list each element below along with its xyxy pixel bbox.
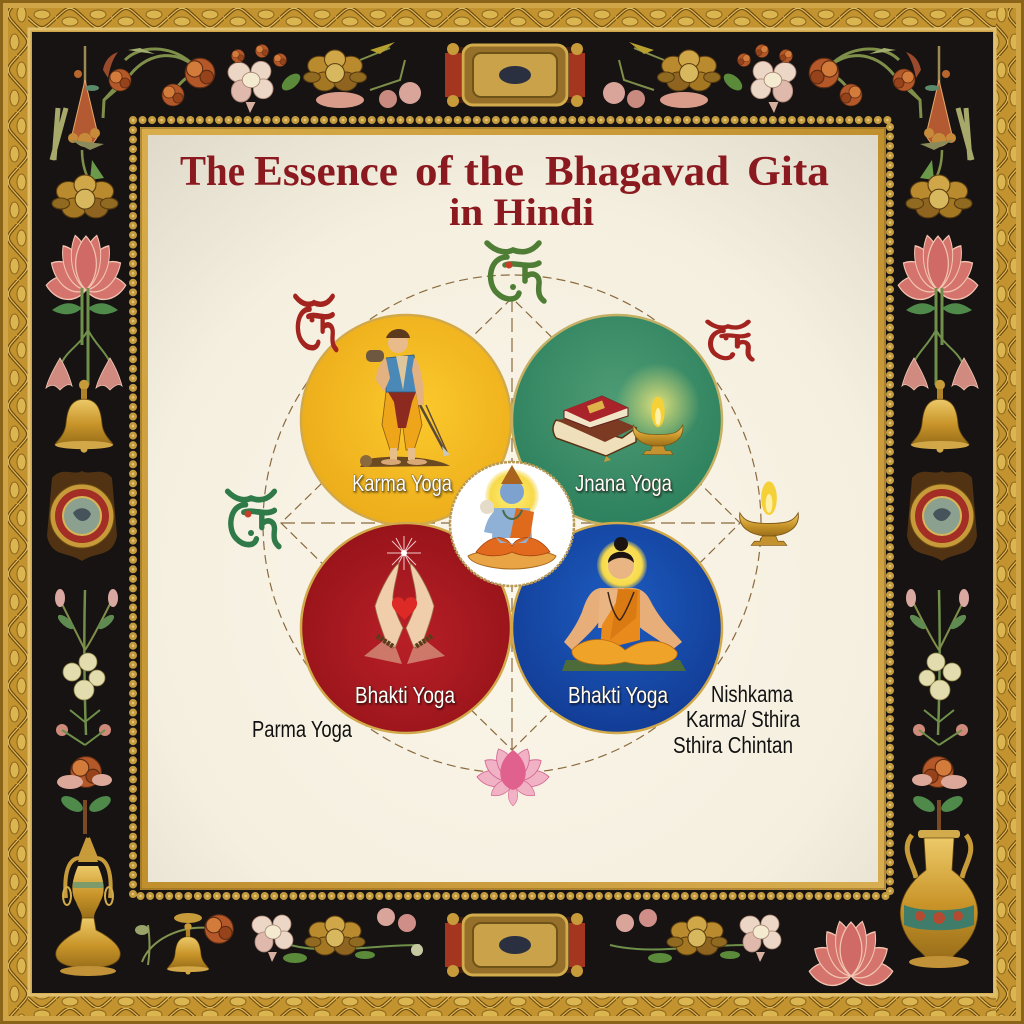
beaded frame	[133, 120, 890, 896]
orange sprig	[103, 48, 215, 118]
title: Bhagavad	[545, 149, 729, 195]
title: The	[180, 149, 245, 195]
pink rose buds	[316, 42, 421, 108]
circle: Bhakti Yoga, blue	[512, 523, 722, 733]
top floral border, left half	[103, 42, 421, 118]
label: Sthira Chintan: Sthira Chintan	[673, 732, 793, 758]
circle: Karma Yoga	[301, 315, 511, 525]
deity body	[476, 465, 550, 556]
green om, top	[487, 243, 544, 301]
label: Karma Yoga: Karma Yoga	[352, 470, 452, 496]
centre deity medallion	[450, 462, 574, 586]
lotus, bottom	[476, 746, 550, 806]
top centre ornament	[445, 43, 585, 107]
label: Parma Yoga: Parma Yoga	[252, 716, 352, 742]
bell	[55, 380, 113, 453]
title	[180, 149, 829, 234]
circle: Jnana Yoga	[512, 315, 722, 525]
label: Nishkama: Nishkama	[711, 681, 793, 707]
title: Gita	[747, 149, 829, 195]
circle: Bhakti Yoga, red	[301, 523, 511, 733]
icon: star burst	[387, 536, 421, 570]
lower rose	[57, 757, 113, 834]
lotus seat	[468, 550, 556, 569]
label: Bhakti Yoga: Bhakti Yoga	[568, 682, 668, 708]
stem with leaves and buds	[46, 288, 122, 390]
paper panel	[148, 135, 878, 882]
title: Essence	[254, 149, 398, 195]
top floral border, right half	[603, 42, 921, 118]
bottom right lotus	[808, 918, 894, 988]
bottom floral, right of centre	[610, 909, 781, 963]
icon: man with rod	[360, 329, 450, 467]
bottom floral, left of centre	[252, 908, 423, 963]
left vase	[56, 838, 120, 976]
icon: oil lamp	[633, 397, 683, 455]
title: in Hindi	[449, 191, 594, 234]
red swastika, upper right	[708, 322, 752, 360]
icon: books	[553, 396, 636, 462]
medallion	[47, 471, 117, 561]
right vase	[900, 830, 978, 968]
green om, left	[228, 491, 279, 546]
pink flower cluster	[228, 44, 303, 113]
label: Karma/ Sthira: Karma/ Sthira	[686, 706, 800, 732]
icon: meditating sage	[562, 537, 686, 671]
icon: cupped hands with heart	[364, 563, 445, 664]
spike flower	[52, 46, 104, 180]
gold lamp, right	[740, 481, 798, 545]
gold flower	[304, 50, 366, 91]
right column ornaments	[897, 46, 979, 834]
pink lotus	[45, 232, 127, 302]
inner gold frame	[140, 127, 886, 890]
floral spray	[55, 589, 118, 745]
red om, upper left	[295, 296, 336, 350]
label: Bhakti Yoga: Bhakti Yoga	[355, 682, 455, 708]
bottom centre ornament	[445, 913, 585, 977]
left column ornaments	[45, 46, 127, 834]
dashed sacred geometry	[263, 275, 761, 773]
gold flower	[52, 175, 118, 218]
label: Jnana Yoga: Jnana Yoga	[575, 470, 672, 496]
bottom left bell with flowers	[135, 913, 233, 975]
title: of the	[415, 149, 524, 195]
